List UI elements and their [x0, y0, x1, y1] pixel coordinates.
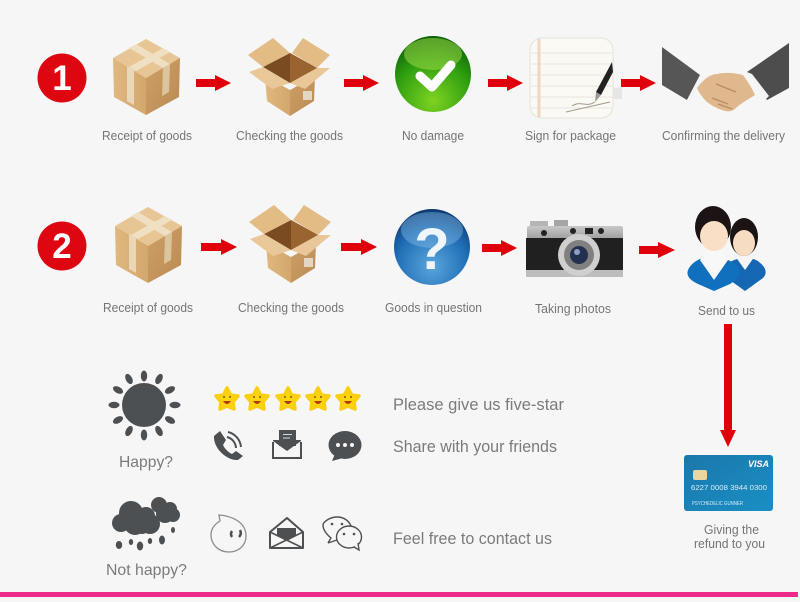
icon: green check ball [395, 36, 471, 112]
icon: open box, row 1 [248, 38, 330, 116]
icon: closed box, row 1 [113, 39, 180, 115]
icon: open box, row 2 [249, 205, 331, 283]
bottom pink rule [0, 592, 798, 597]
label: Not happy? [106, 562, 187, 579]
label: Happy? [119, 454, 173, 471]
label: Please give us five-star [393, 396, 565, 414]
icon: sun [108, 370, 180, 440]
icon: handshake [662, 43, 789, 111]
label: Sign for package [525, 129, 616, 143]
icon: closed box, row 2 [115, 207, 182, 283]
arrow [341, 239, 377, 255]
arrow [488, 75, 523, 91]
icon: blue question ball: ? [414, 217, 450, 282]
label: Checking the goods [236, 129, 343, 143]
five star rating [216, 388, 359, 409]
badge: step 1 [38, 54, 86, 102]
icon: support agents [687, 206, 766, 291]
arrow: down to refund [720, 324, 736, 447]
badge: step 2: 2 [52, 227, 72, 266]
icon: credit card: PSYCHEDELIC GUNNER [692, 501, 743, 507]
label: Share with your friends [393, 438, 557, 456]
icon: open mail [273, 430, 301, 458]
arrow [344, 75, 379, 91]
label: No damage [402, 129, 464, 143]
label [694, 523, 765, 551]
badge: step 1: 1 [52, 59, 72, 98]
icon: camera [526, 220, 623, 277]
arrow [482, 240, 517, 256]
label: Receipt of goods [103, 301, 193, 315]
label: Send to us [698, 304, 755, 318]
badge: step 2 [38, 222, 86, 270]
arrow [196, 75, 231, 91]
icon: chat bubble [328, 431, 362, 461]
icon: blue question ball [394, 209, 470, 285]
label: Receipt of goods [102, 129, 192, 143]
label: Goods in question [385, 301, 482, 315]
icon: rain clouds [112, 497, 180, 550]
label: Feel free to contact us [393, 530, 552, 548]
icon: QQ bubble [211, 515, 246, 552]
icon: credit card: 6227 0008 3944 0300 [691, 485, 767, 492]
label: Confirming the delivery [662, 129, 786, 143]
icon: credit card [684, 455, 773, 511]
icon: phone [214, 431, 243, 460]
icon: WeChat bubbles [323, 517, 362, 550]
label: refund to you [694, 537, 765, 551]
icon: signed notepad [530, 38, 622, 118]
label: Checking the goods [238, 301, 344, 315]
arrow [201, 239, 237, 255]
label: Taking photos [535, 302, 611, 316]
icon: credit card: VISA [748, 459, 769, 469]
arrow [639, 242, 675, 258]
arrow [621, 75, 656, 91]
icon: open envelope [270, 518, 303, 548]
label: Giving the [704, 523, 759, 537]
